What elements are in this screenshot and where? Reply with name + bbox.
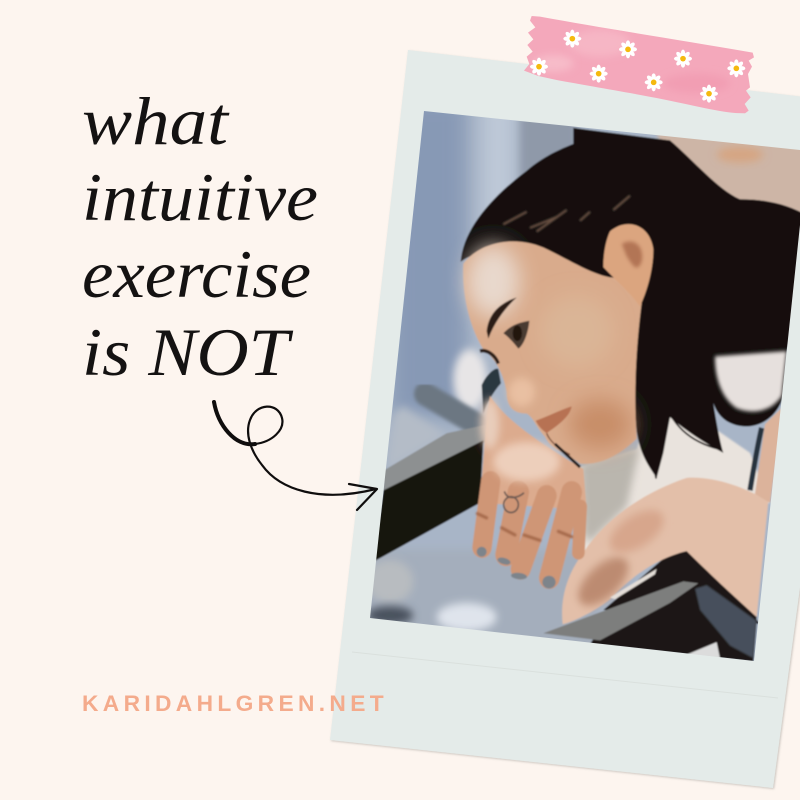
towel on shoulder	[715, 351, 787, 411]
ear	[603, 224, 653, 306]
tattoo	[504, 491, 524, 512]
title: what	[82, 83, 230, 159]
loose hair strands	[654, 418, 718, 480]
title	[82, 83, 318, 390]
title: intuitive	[82, 159, 318, 235]
title: is NOT	[82, 314, 293, 390]
hair	[461, 128, 800, 478]
gym equipment bar, left	[373, 394, 488, 562]
watch	[482, 369, 501, 414]
towel and neck	[580, 416, 770, 550]
washi tape with daisies	[524, 16, 754, 114]
title: exercise	[82, 236, 311, 312]
polaroid frame	[330, 50, 800, 788]
left hand with taurus tattoo	[477, 396, 587, 589]
tank strap	[750, 428, 762, 490]
face	[463, 241, 642, 464]
photo: tired woman leaning on gym equipment	[357, 96, 800, 681]
website footer: KARIDAHLGREN.NET	[82, 691, 388, 716]
dark bar behind arm	[603, 546, 760, 624]
curly arrow pointing to photo	[214, 402, 377, 510]
daisies	[530, 30, 745, 103]
gym equipment bar, right	[543, 564, 757, 662]
photo background	[357, 96, 800, 681]
right arm and hand	[562, 478, 768, 624]
